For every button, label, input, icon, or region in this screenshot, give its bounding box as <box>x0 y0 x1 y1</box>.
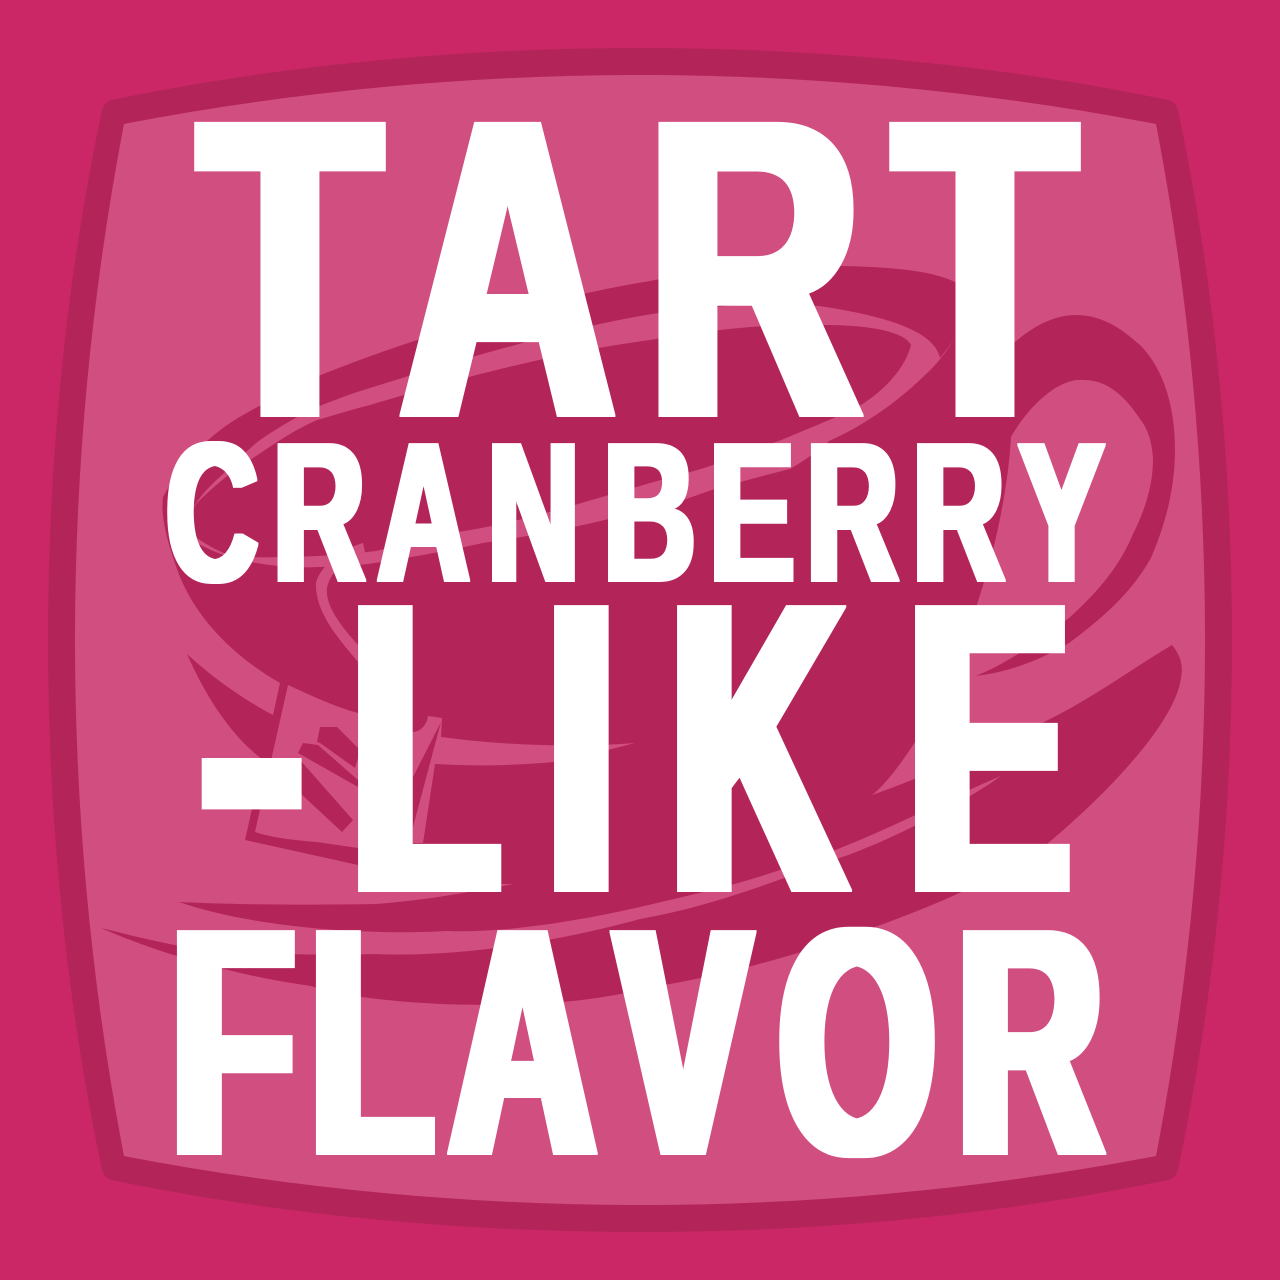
title word: -LIKE: LIKE <box>352 517 1069 979</box>
badge: inner panel <box>75 75 1205 1205</box>
steam curl under rim <box>316 543 365 662</box>
logo lower piece <box>300 760 353 832</box>
logo middle piece <box>298 743 358 787</box>
saucer highlight band <box>101 776 1001 955</box>
tea bag tag <box>255 685 413 860</box>
title word: CRANBERRY: CRANBERRY <box>166 402 1104 624</box>
title word: FLAVOR: FLAVOR <box>171 862 1103 1224</box>
cup highlight stripe <box>413 716 635 843</box>
icon: coffee cup on saucer <box>101 266 1182 1005</box>
tag logo <box>298 727 358 832</box>
logo upper piece <box>317 727 358 768</box>
cup silhouette <box>101 266 1182 1005</box>
cup rim ring <box>188 304 958 567</box>
title word: TART: TART <box>199 30 1076 506</box>
title word: -LIKE: - <box>199 516 304 979</box>
